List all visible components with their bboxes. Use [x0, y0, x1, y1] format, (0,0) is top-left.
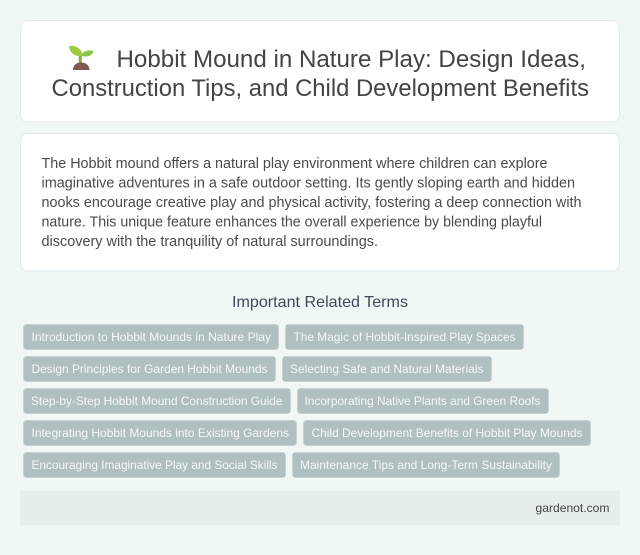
- chip: integrating: Integrating Hobbit Mounds into Existing Gardens: [32, 426, 289, 440]
- chip: introduction: [24, 324, 278, 350]
- chip: maintenance: Maintenance Tips and Long-Term Sustainability: [300, 458, 552, 472]
- panel: description: imaginative adventures in a safe outdoor setting. Its gently sloping earth and hidden: [42, 176, 575, 192]
- panel: title card: [20, 20, 620, 122]
- chip: introduction: Introduction to Hobbit Mounds in Nature Play: [32, 330, 271, 344]
- panel: description: nooks encourage creative play and physical activity, fostering a deep connection with: [42, 195, 582, 211]
- chip: native plants: [298, 388, 548, 414]
- title text: Hobbit Mound in Nature Play: Design Ideas,: [116, 46, 586, 73]
- chip: materials: [282, 356, 492, 382]
- chip: integrating: [24, 420, 296, 446]
- chip: child development: Child Development Benefits of Hobbit Play Mounds: [312, 426, 582, 440]
- chip: design principles: [24, 356, 276, 382]
- chip: design principles: Design Principles for Garden Hobbit Mounds: [32, 362, 268, 376]
- footer: gardenot.com: [536, 501, 610, 515]
- footer: [20, 491, 620, 525]
- chip: imaginative play: [24, 452, 286, 478]
- panel: description: The Hobbit mound offers a natural play environment where children can explore: [42, 156, 548, 172]
- chip: materials: Selecting Safe and Natural Materials: [290, 362, 484, 376]
- chip: child development: [304, 420, 590, 446]
- panel: description: [20, 134, 620, 271]
- panel: description: nature. This unique feature enhances the overall experience by blending playful: [42, 214, 542, 230]
- title text: [52, 46, 589, 102]
- panel: term chips: [24, 324, 590, 478]
- title text: Construction Tips, and Child Development Benefits: [52, 75, 589, 102]
- chip: imaginative play: Encouraging Imaginative Play and Social Skills: [32, 458, 278, 472]
- chip: construction guide: [24, 388, 290, 414]
- chip: magic: The Magic of Hobbit-Inspired Play Spaces: [294, 330, 516, 344]
- chip: native plants: Incorporating Native Plants and Green Roofs: [304, 394, 540, 408]
- panel: description: discovery with the tranquility of natural surroundings.: [42, 234, 378, 250]
- heading: related terms: Important Related Terms: [232, 294, 408, 311]
- chip: magic: [286, 324, 524, 350]
- chip: construction guide: Step-by-Step Hobbit Mound Construction Guide: [31, 394, 283, 408]
- chip: maintenance: [292, 452, 560, 478]
- icon: seedling: [69, 46, 94, 70]
